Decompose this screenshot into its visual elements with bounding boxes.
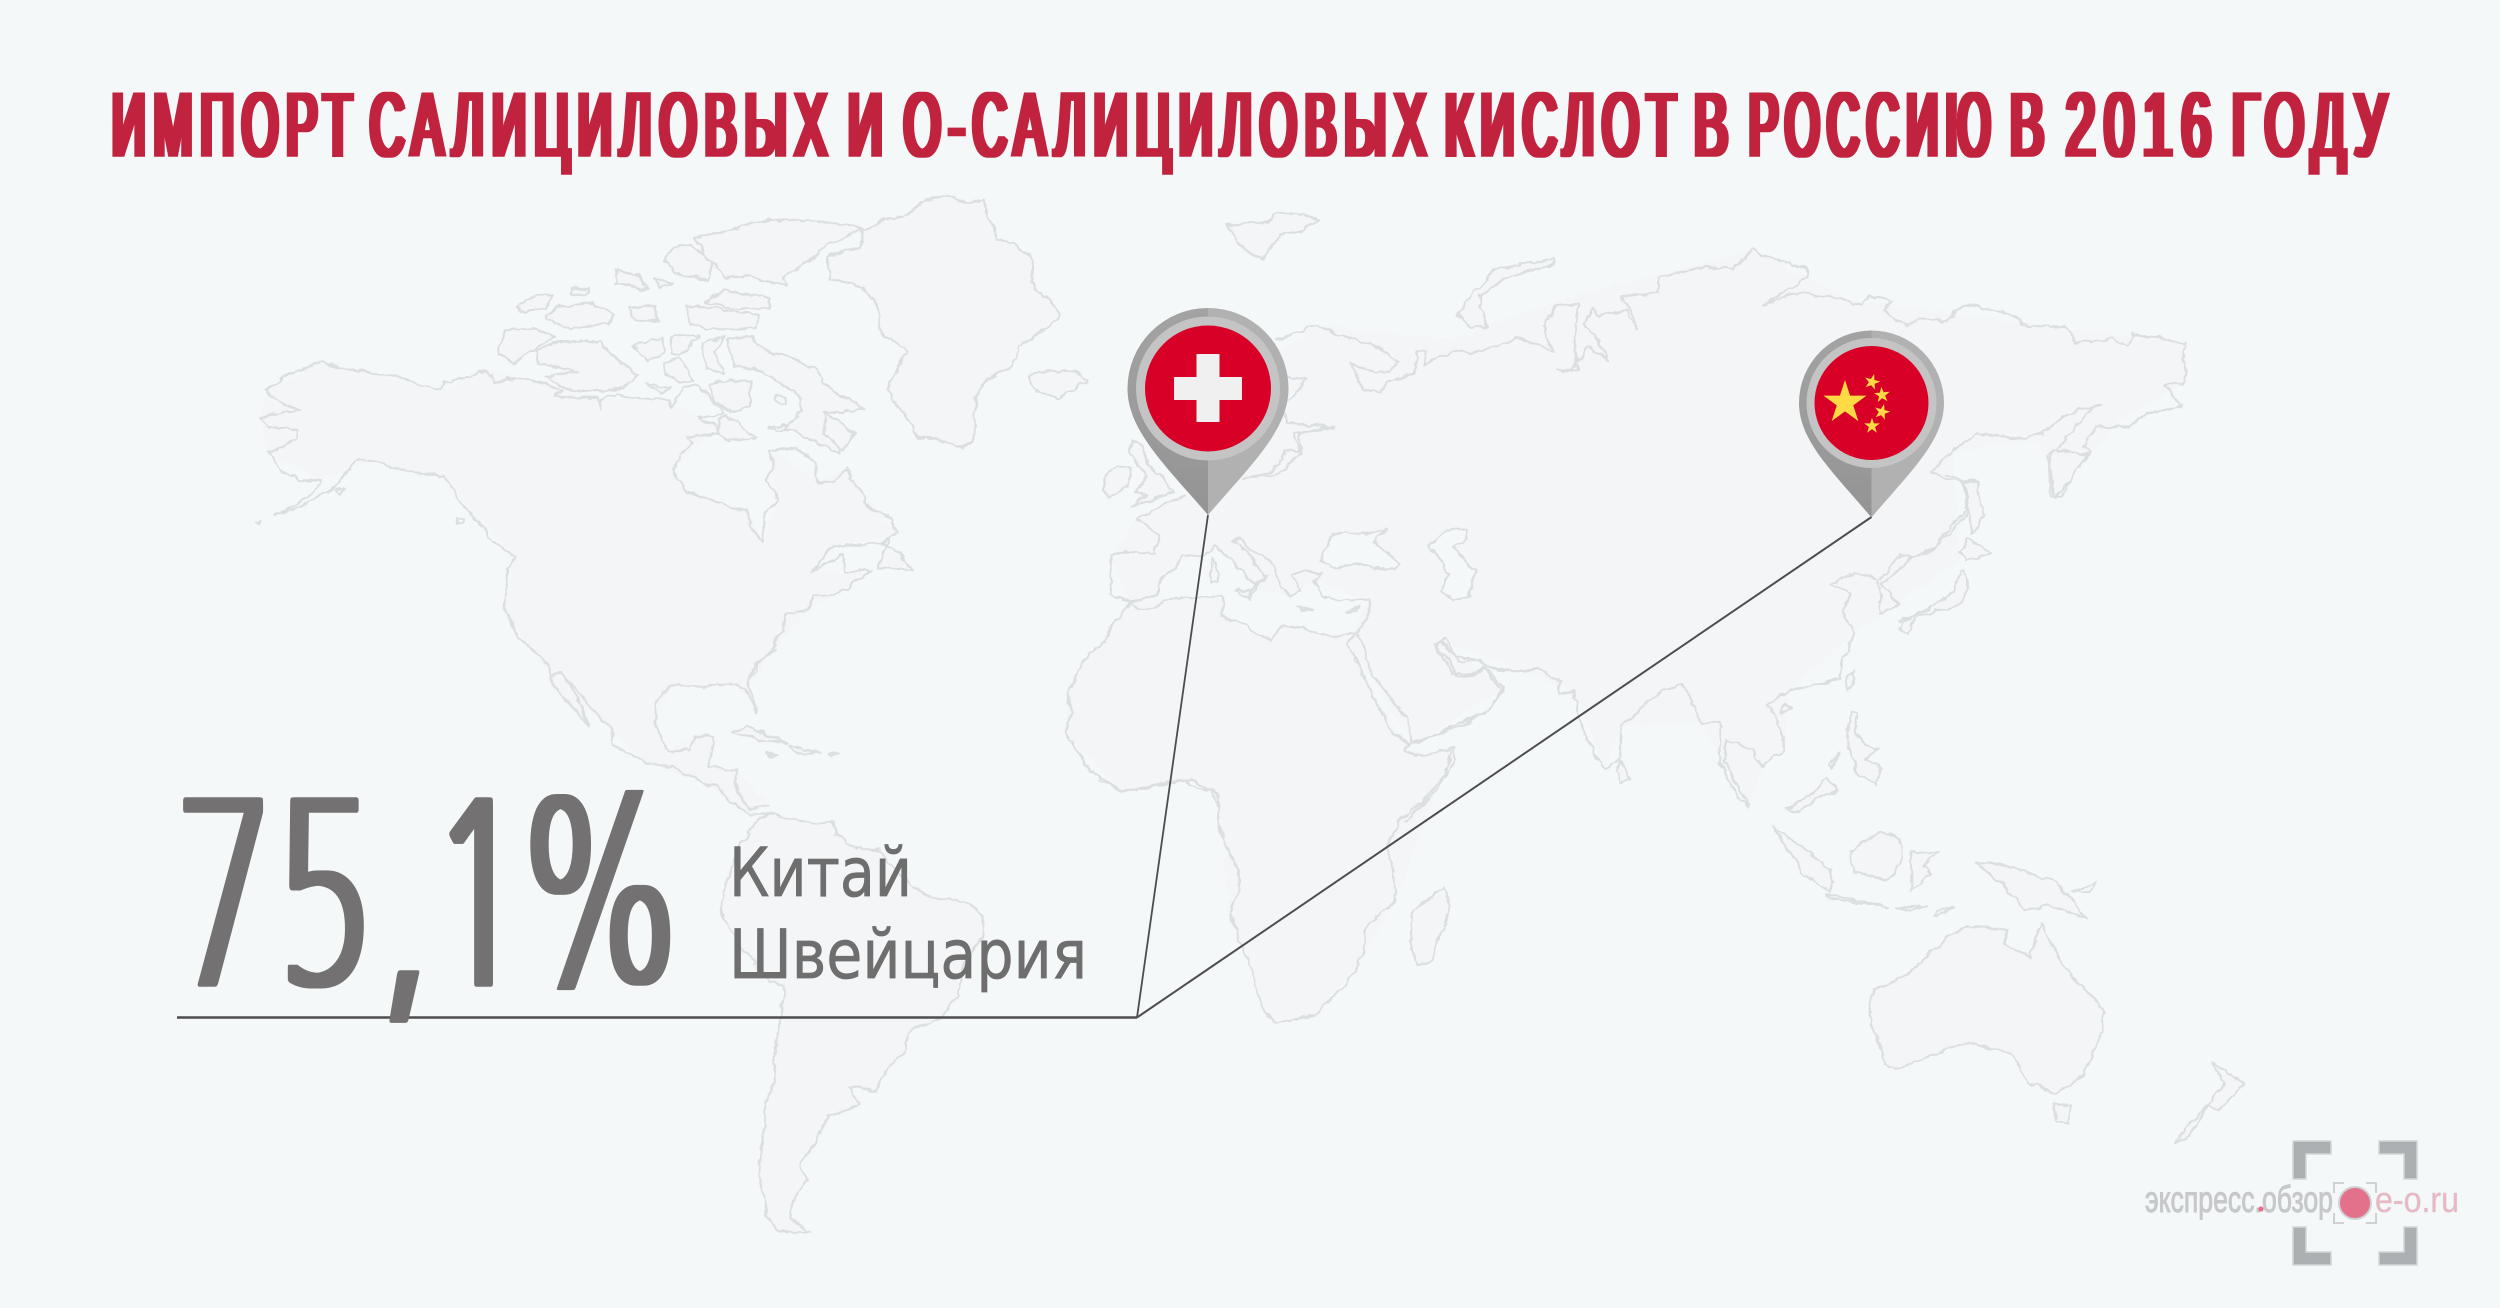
- Somerset: [671, 335, 699, 355]
- Taiwan: [1846, 671, 1854, 690]
- Baffin Island: [728, 337, 865, 453]
- islet 3: [653, 278, 671, 288]
- map: North America north and Arctic: [256, 195, 1087, 680]
- Jamaica: [767, 753, 777, 756]
- pin right half: [1208, 308, 1288, 515]
- Philippines: [1846, 711, 1881, 785]
- Labrador isle: [824, 413, 855, 450]
- large star: [1823, 380, 1867, 421]
- Aleutian islets: [256, 520, 260, 525]
- title: РОССИЮ: [1749, 75, 1998, 176]
- title word 8: В: [2010, 75, 2053, 176]
- Svalbard: [1227, 213, 1318, 260]
- title word 4: О-САЛИЦИЛОВЫХ: [904, 75, 1434, 176]
- Vancouver Isle: [457, 518, 463, 523]
- Primorye link: [1911, 475, 1969, 557]
- Nettilling lake: [775, 393, 786, 405]
- Victoria Island: [537, 342, 639, 392]
- map: land tint: [259, 250, 2185, 1024]
- flag cross: [1174, 354, 1242, 422]
- Sulawesi: [1911, 852, 1938, 890]
- Australia: [1869, 923, 2103, 1093]
- logo text right: e-o.ru: [2375, 1179, 2459, 1220]
- bottom-right bracket: [2379, 1227, 2417, 1265]
- islet 2: [629, 305, 658, 322]
- line to Switzerland: [1137, 515, 1208, 1018]
- King William: [664, 358, 693, 383]
- title word 9: 2016: [2066, 75, 2220, 176]
- figure text: 75,1%: [176, 770, 686, 1023]
- title word 2: САЛИЦИЛОВЫХ: [370, 75, 835, 176]
- flag stars: [1823, 372, 1892, 433]
- pin right half: [1872, 330, 1944, 518]
- Tasmania: [2053, 1104, 2072, 1124]
- Gulf of Mexico coast and Florida: [655, 650, 774, 809]
- Cornwallis: [706, 290, 769, 308]
- title word 1: ИМПОРТ: [112, 75, 360, 176]
- title word 5: КИСЛОТ: [1445, 75, 1684, 176]
- Madagascar: [1410, 887, 1451, 966]
- world map: [256, 195, 2244, 1232]
- map: Russia and north Asia: [1227, 213, 2185, 580]
- line to China: [1137, 517, 1872, 1018]
- Hainan: [1781, 702, 1793, 711]
- Java: [1827, 894, 1888, 908]
- Sicily: [1235, 590, 1253, 598]
- logo disc: [2340, 1188, 2370, 1218]
- South America: [721, 813, 984, 1232]
- islet: [572, 288, 590, 293]
- Mexico and Central America west coast: [560, 673, 769, 815]
- small star 4: [1864, 418, 1880, 433]
- Lesser Sunda: [1896, 905, 1927, 911]
- Baja California: [550, 673, 588, 725]
- Sakhalin: [1965, 481, 1984, 535]
- Iceland: [1028, 370, 1087, 398]
- bottom-left bracket: [2293, 1227, 2331, 1265]
- pin ring: [1806, 338, 1936, 468]
- top-left bracket: [2293, 1141, 2331, 1179]
- Banks Island: [498, 328, 556, 365]
- Arctic islands: [616, 270, 648, 290]
- Sumatra: [1773, 827, 1831, 892]
- Kyushu: [1900, 615, 1915, 635]
- Prince of Wales: [632, 337, 664, 362]
- Hokkaido: [1961, 539, 1992, 562]
- outer corner brackets: [2293, 1141, 2417, 1265]
- map: Central and South America: [550, 650, 984, 1232]
- Arabia: [1358, 635, 1540, 743]
- logo dot: [2258, 1206, 2264, 1212]
- pin: China: [1799, 330, 1944, 518]
- Newfoundland: [878, 538, 913, 572]
- Kodiak: [336, 488, 345, 495]
- East Africa coast: [1100, 749, 1452, 1024]
- Caspian Sea: [1430, 528, 1475, 600]
- Hispaniola: [790, 746, 820, 753]
- Greenland: [827, 195, 1060, 448]
- Devon Island: [686, 305, 760, 328]
- label: China: Китай: [729, 834, 912, 913]
- Borneo: [1850, 832, 1904, 881]
- Ellesmere Island: [696, 220, 862, 287]
- small inner brackets: [2334, 1183, 2376, 1223]
- Southampton Island: [718, 415, 757, 442]
- top-right bracket: [2379, 1141, 2417, 1179]
- Africa north and west coast: [1065, 595, 1455, 820]
- flag disc: [1145, 326, 1271, 452]
- pin left half: [1128, 308, 1208, 515]
- Kamchatka tail: [2049, 450, 2087, 498]
- small star 1: [1863, 372, 1882, 391]
- baseline under figure: [177, 1016, 1137, 1019]
- logo text left: экспресс.обзор: [2145, 1179, 2333, 1220]
- Crete: [1297, 607, 1313, 611]
- Cyprus: [1347, 607, 1360, 612]
- watermark logo: [2145, 1141, 2459, 1265]
- Melville Peninsula: [709, 380, 750, 412]
- title: [112, 75, 2395, 176]
- title word 3: И: [848, 75, 891, 176]
- New Zealand north: [2210, 1062, 2244, 1111]
- Akimiski: [769, 425, 789, 432]
- Bathurst: [546, 303, 613, 328]
- pin: Switzerland: [1128, 308, 1288, 515]
- Melville: [516, 293, 553, 312]
- East Asia coast: [1414, 557, 1911, 807]
- label: Switzerland: Швейцария: [729, 916, 1087, 995]
- Baltic coast: [1245, 427, 1335, 478]
- Mediterranean north coast, Italy, Balkans, Turkey: [1130, 538, 1368, 633]
- Timor: [1934, 908, 1953, 916]
- Alaska and Canada coast: [259, 363, 897, 680]
- north Borneo fragment: [1786, 778, 1839, 812]
- pin left half: [1799, 330, 1872, 518]
- pin ring: [1136, 316, 1280, 460]
- New Guinea: [1976, 863, 2087, 919]
- Sri Lanka: [1617, 760, 1630, 783]
- New Zealand south: [2175, 1104, 2210, 1142]
- Western Europe and north Mediterranean coast: [1110, 495, 1185, 602]
- map: Europe, Mediterranean, north Africa, Middle East: [1065, 427, 1540, 820]
- Novaya Zemlya: [1457, 258, 1553, 328]
- Scandinavia coast: [1245, 377, 1336, 478]
- Brodeur: [702, 337, 725, 373]
- Great Britain: [1130, 440, 1173, 507]
- small star 2: [1873, 386, 1890, 402]
- flag disc: [1814, 346, 1928, 460]
- small star 3: [1873, 402, 1892, 421]
- north Asian coast: [1276, 250, 2185, 580]
- Honshu: [1900, 571, 1969, 622]
- logo ring: [2338, 1186, 2372, 1220]
- Ireland: [1103, 467, 1130, 496]
- map: South and East Asia, East Africa, Oceania: [1100, 450, 2244, 1142]
- Puerto Rico: [830, 753, 838, 756]
- Axel Heiberg: [664, 245, 712, 280]
- leader lines: [177, 515, 1872, 1018]
- Sardinia and Corsica: [1210, 558, 1218, 583]
- Black Sea: [1320, 528, 1400, 570]
- Palawan: [1829, 754, 1841, 769]
- New Britain: [2072, 883, 2095, 892]
- title word 6: В: [1694, 75, 1737, 176]
- Cuba: [731, 726, 787, 744]
- islet 4: [648, 383, 671, 393]
